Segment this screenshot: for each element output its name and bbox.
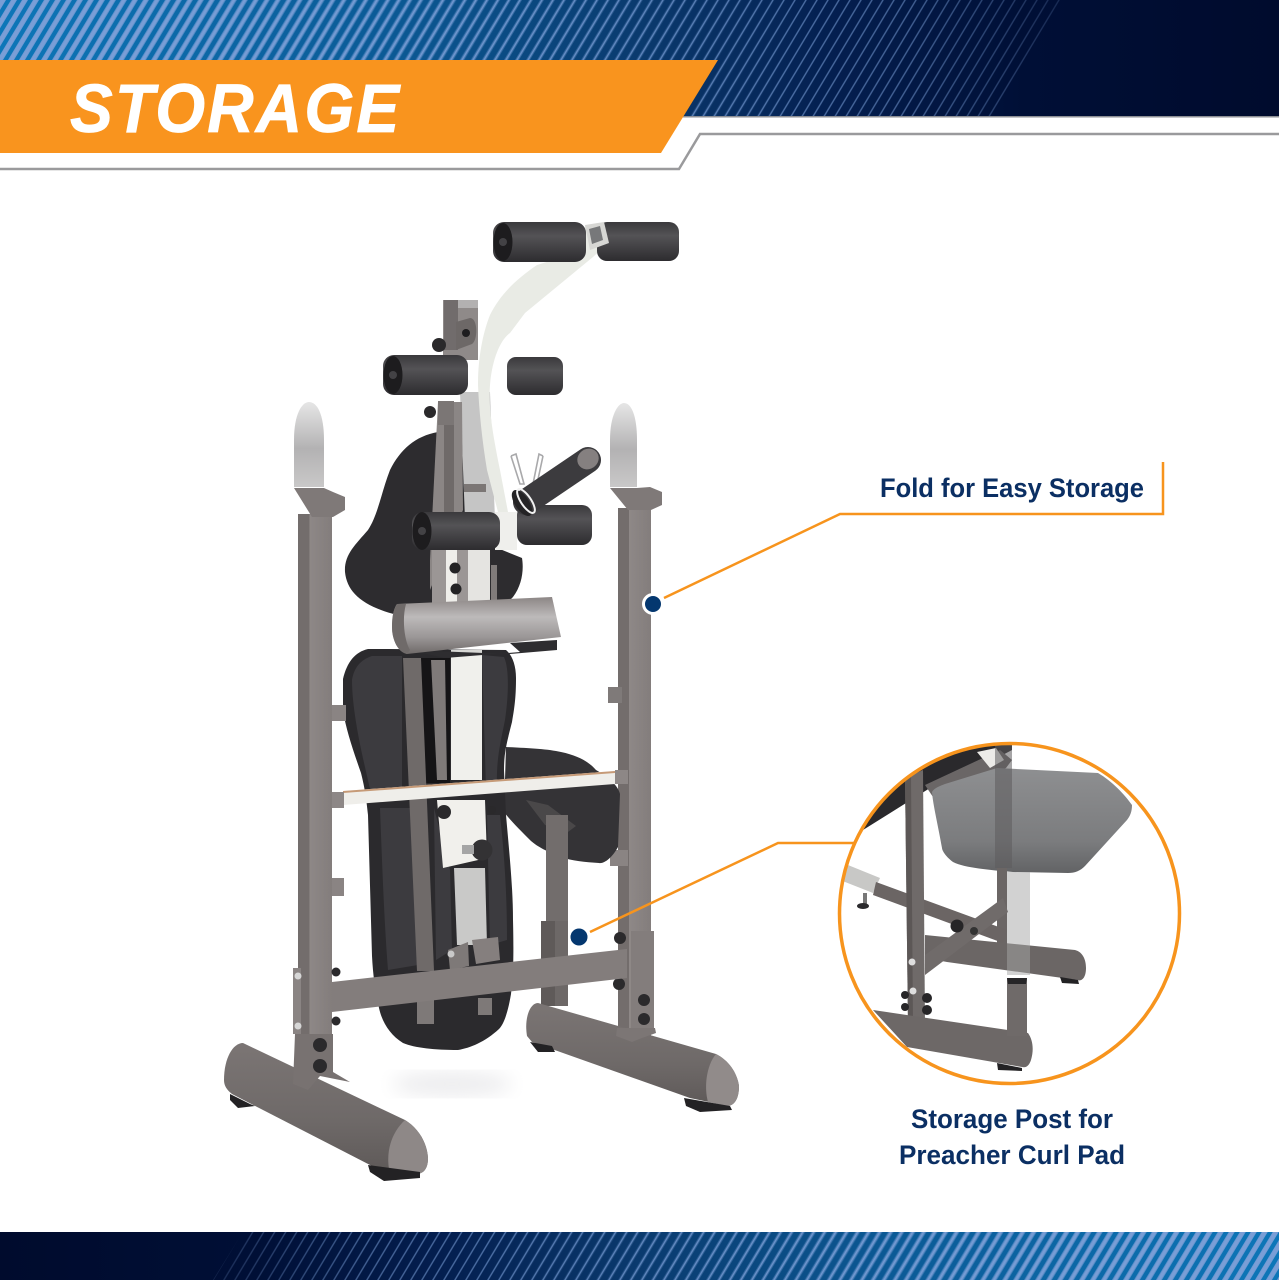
white cross rod — [332, 770, 628, 808]
spring collar clips — [511, 454, 543, 484]
weight bench folded for storage — [224, 222, 739, 1181]
bottom cross bar — [332, 949, 627, 1012]
silver seat extension — [844, 865, 880, 893]
long back pad — [343, 649, 516, 1050]
inset caption: Storage Post for — [911, 1104, 1113, 1134]
foot pads — [230, 1094, 255, 1108]
callout: fold for easy storage — [644, 462, 1163, 614]
header divider line — [0, 134, 1279, 169]
center frame rails — [403, 650, 487, 971]
front left upright — [293, 402, 350, 1090]
header band — [0, 0, 1279, 118]
low roller pads and weight peg — [412, 445, 603, 550]
pivot bracket — [448, 937, 500, 970]
callout label: Fold for Easy Storage — [880, 473, 1144, 503]
inset ring — [840, 744, 1180, 1084]
post cap tongue — [294, 402, 324, 487]
seat support post — [526, 800, 576, 1006]
upper frame column — [424, 300, 497, 610]
inset caption: Preacher Curl Pad — [899, 1140, 1125, 1170]
post cap tongue — [610, 403, 637, 487]
middle roller pads — [383, 355, 563, 395]
bench back in inset — [864, 745, 1012, 830]
title banner — [0, 60, 718, 153]
leader line — [664, 462, 1163, 598]
ghosted preacher pad — [932, 768, 1132, 873]
post hook — [610, 487, 662, 510]
storage post in inset — [1007, 978, 1027, 1036]
rear right upright — [608, 403, 662, 1036]
inset leader line — [590, 843, 855, 932]
bottom pad tabs — [417, 998, 492, 1024]
title: STORAGE: STORAGE — [70, 71, 402, 148]
footer band — [0, 1232, 1279, 1280]
top roller pad — [493, 222, 679, 262]
white folding arm — [478, 225, 608, 512]
preacher curl pad roll — [392, 597, 561, 658]
post hook — [294, 488, 345, 517]
inset caption — [899, 1104, 1125, 1170]
left foot — [224, 1043, 428, 1181]
seat pad — [504, 747, 620, 863]
diagonal support bar — [873, 882, 997, 941]
inset callout dot — [570, 928, 588, 946]
foot pads — [530, 1042, 555, 1052]
callout dot — [644, 594, 662, 614]
floor shadow — [392, 1072, 512, 1096]
detail inset: storage post — [570, 730, 1180, 1170]
front foot in inset — [873, 1010, 1033, 1067]
long pad inner face — [352, 655, 508, 970]
white adjuster bracket — [437, 800, 496, 868]
upper back pad — [345, 430, 523, 615]
right foot — [526, 932, 739, 1112]
front upright in inset — [905, 770, 925, 1025]
rear foot in inset — [925, 935, 1086, 980]
